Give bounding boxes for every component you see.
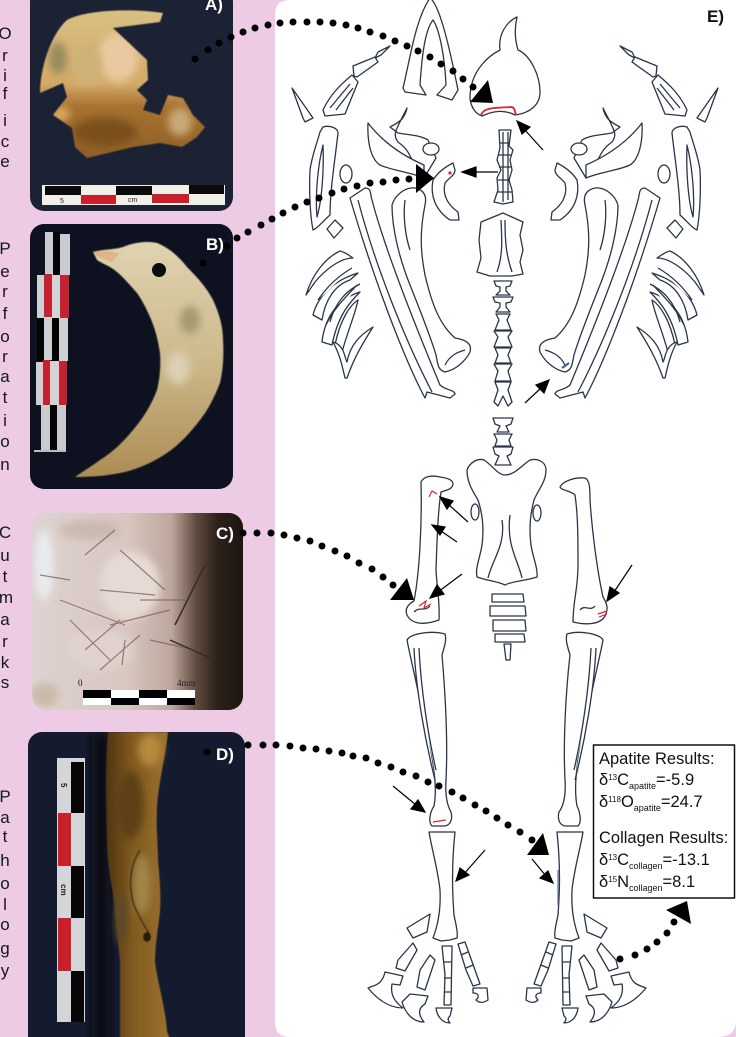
collagen nitrogen value: δ [599, 873, 608, 891]
toe four [458, 942, 480, 986]
side label: Pathology: t [3, 827, 8, 846]
panel B: perforation photograph [30, 224, 233, 489]
side label: Pathology: y [1, 961, 10, 980]
humerus [392, 188, 470, 372]
side label: Pathology: o [0, 915, 10, 934]
scale bar C: 0 [78, 678, 83, 688]
side label: Cut marks: r [2, 632, 8, 651]
panel C: cut marks photograph [31, 513, 243, 710]
collagen carbon value: C [617, 851, 629, 869]
radius and ulna [350, 188, 455, 398]
skull fragment [40, 10, 205, 158]
side label: Perforation [0, 239, 11, 474]
side label: Orifice: i [3, 111, 7, 130]
side label: Perforation: r [2, 282, 8, 301]
toe two [417, 955, 435, 990]
tail vertebrae [490, 594, 526, 660]
side label: Cut marks: a [0, 610, 10, 629]
skeleton: right wing, mirrored [540, 46, 718, 398]
perforation hole [152, 263, 166, 277]
side label: Pathology: l [3, 895, 7, 914]
scapula and coracoid [390, 108, 436, 178]
collagen nitrogen value: collagen [629, 883, 663, 893]
label C): C) [216, 524, 234, 543]
side label: Perforation: a [0, 367, 10, 386]
side label: Cut marks: u [0, 546, 10, 565]
tarsometatarsus [429, 832, 457, 941]
pelvis [467, 459, 546, 585]
side label: Cut marks [0, 523, 13, 692]
left foot [368, 914, 488, 1023]
apatite oxygen value: 118 [608, 795, 621, 804]
carpometacarpus ring [310, 126, 338, 230]
side label: Pathology: a [0, 808, 10, 827]
small carpals [340, 165, 352, 183]
scale bar C [78, 678, 196, 705]
side label: Pathology: h [0, 851, 10, 870]
dotted connector: A to skull [195, 22, 493, 103]
scale bar C: 4mm [177, 678, 196, 688]
skeleton: left wing, one side [292, 46, 470, 398]
label D): D) [216, 745, 234, 764]
spine: thoracic vertebrae [493, 281, 513, 465]
panel D: pathology photograph [28, 732, 245, 1037]
side label: Orifice: i [3, 66, 7, 85]
apatite heading: Apatite Results: [599, 750, 715, 768]
side label: Cut marks: s [1, 673, 9, 692]
toe one [407, 914, 430, 938]
side label: Perforation: t [3, 388, 8, 407]
dotted connector: foot to results box [620, 901, 691, 959]
scale bar A: 5 [60, 198, 64, 205]
right foot, mirrored [526, 914, 646, 1023]
side label: Perforation: i [3, 411, 7, 430]
collagen carbon value: collagen [629, 861, 663, 871]
apatite carbon value: 13 [608, 773, 618, 782]
side label: Orifice: r [2, 46, 8, 65]
apatite carbon value: δ [599, 771, 608, 789]
side label: Perforation: o [0, 432, 10, 451]
side label: Orifice: f [3, 84, 8, 103]
label E): E) [707, 7, 724, 26]
scale bar A [42, 185, 225, 205]
feather-like ribs [306, 251, 353, 295]
panel A: orifice photograph [30, 0, 233, 211]
label B): B) [206, 235, 224, 254]
apatite carbon value: apatite [629, 781, 656, 791]
side label: Perforation: e [0, 262, 10, 281]
apatite oxygen value: δ [599, 793, 608, 811]
side label: Cut marks: k [1, 653, 10, 672]
side label: Pathology [0, 787, 11, 980]
wishbone [403, 0, 458, 100]
collagen carbon value: 13 [608, 853, 618, 862]
black pointer arrows [393, 121, 632, 883]
skull-shaped bone with orifice marked red [470, 17, 540, 116]
collagen heading: Collagen Results: [599, 829, 728, 847]
spine: cervical vertebrae [494, 130, 513, 204]
side label: Pathology: g [0, 939, 10, 958]
collagen nitrogen value: N [617, 873, 629, 891]
perforated claw [75, 242, 223, 477]
collagen carbon value: δ [599, 851, 608, 869]
side label: Perforation: r [2, 347, 8, 366]
dotted connector: C to femur [243, 533, 414, 600]
collagen carbon value: =-13.1 [663, 851, 710, 869]
femur and tibia cut-mark highlights in red, blue pathology marks [419, 172, 607, 905]
side label: Orifice: e [0, 152, 10, 171]
side label: Perforation: f [3, 304, 8, 323]
tibia and fibula [407, 632, 452, 826]
toe three [442, 946, 452, 1005]
side label: Orifice [0, 24, 12, 171]
cut mark scratches [40, 530, 195, 670]
scale bar D: cm [59, 884, 68, 896]
digit bone [353, 57, 378, 77]
femur [560, 478, 607, 624]
collagen nitrogen value: =8.1 [663, 873, 695, 891]
scale bar D: 5 [59, 783, 68, 788]
pathological bone [106, 732, 170, 1037]
crescent bone [432, 163, 459, 220]
sacrum [477, 213, 523, 276]
side label: Orifice: c [1, 132, 10, 151]
side label: Perforation: o [0, 327, 10, 346]
femur [406, 476, 453, 623]
scale bar D [57, 758, 85, 1022]
dotted connector: D to tarsometatarsus [207, 745, 549, 855]
collagen nitrogen value: 15 [608, 875, 618, 884]
side label: Pathology: o [0, 874, 10, 893]
white skeleton panel [275, 0, 736, 1037]
bone surface tones [31, 520, 160, 707]
apatite oxygen value: apatite [634, 803, 661, 813]
right leg bones [555, 478, 607, 941]
claw tip [375, 46, 390, 58]
dotted connector: B to crescent bone [203, 164, 434, 263]
side label: Cut marks: t [3, 567, 8, 586]
isotope results box [594, 745, 734, 898]
apatite oxygen value: O [621, 793, 634, 811]
scale bar A: cm [128, 197, 138, 204]
side label: Perforation: n [0, 455, 10, 474]
apatite oxygen value: =24.7 [661, 793, 703, 811]
apatite carbon value: =-5.9 [656, 771, 694, 789]
scale bar B [34, 232, 70, 452]
apatite carbon value: C [617, 771, 629, 789]
left leg bones [406, 476, 457, 941]
